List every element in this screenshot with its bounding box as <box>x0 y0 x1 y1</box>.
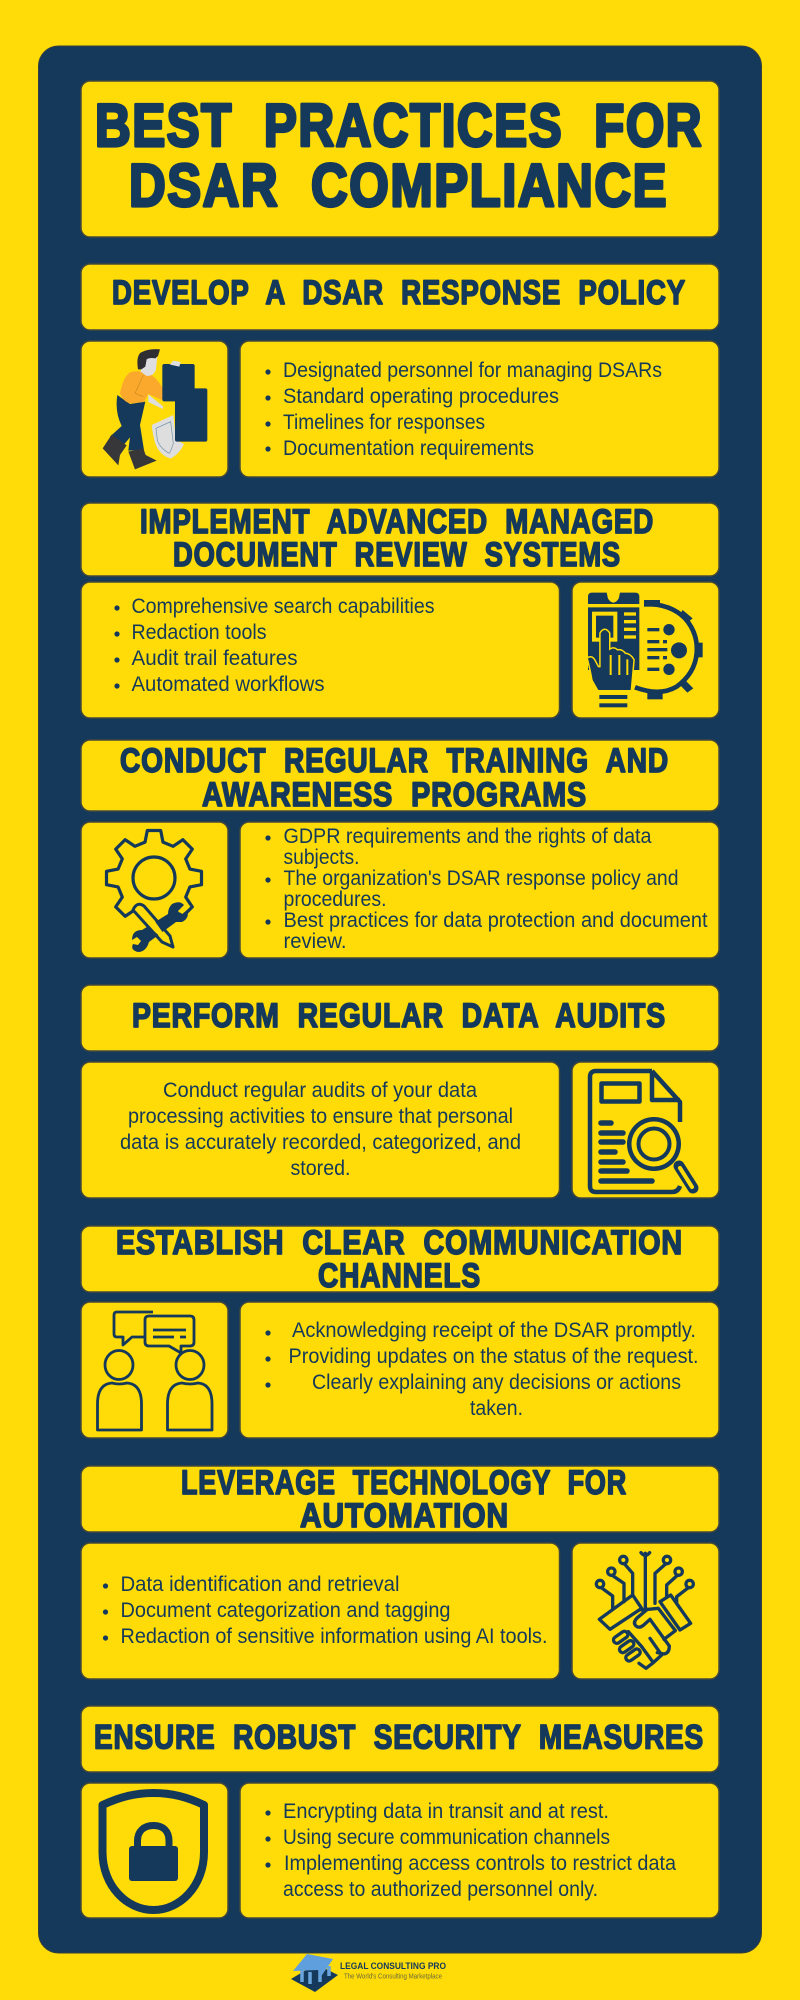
panel: tech handshake icon <box>572 1543 719 1679</box>
panel: automation list: Redaction of sensitive information using AI tools. <box>120 1624 548 1648</box>
panel: communication list: Clearly explaining any decisions or actions <box>312 1370 681 1394</box>
icon: document with magnifier <box>590 1071 693 1192</box>
heading: communication <box>81 1224 719 1295</box>
panel: policy list: Designated personnel for managing DSARs <box>283 358 662 382</box>
panel: gear and tools icon <box>81 822 228 958</box>
heading: data audits: PERFORM REGULAR DATA AUDITS <box>132 997 666 1035</box>
panel: communication list: Acknowledging receipt of the DSAR promptly. <box>292 1318 696 1342</box>
panel: document search icon <box>572 1062 719 1198</box>
panel: training list: subjects. <box>284 845 360 869</box>
logo: Legal Consulting Pro: LEGAL CONSULTING PRO <box>340 1961 446 1972</box>
panel: review list: Audit trail features <box>132 646 298 670</box>
panel: training list: review. <box>284 929 346 953</box>
panel: communication list <box>240 1302 719 1438</box>
panel: policy list: Standard operating procedures <box>283 384 559 408</box>
panel: training list <box>240 822 719 958</box>
panel: communication list: Providing updates on the status of the request. <box>288 1344 698 1368</box>
panel: review list <box>81 582 560 718</box>
icon: building <box>291 1954 338 1992</box>
icon: two people with speech bubbles <box>98 1312 212 1430</box>
panel: security list: Implementing access controls to restrict data <box>284 1851 676 1875</box>
title: DSAR COMPLIANCE <box>129 152 668 219</box>
logo: Legal Consulting Pro <box>291 1954 446 1992</box>
panel: training list: Best practices for data protection and document <box>284 908 708 932</box>
heading: automation <box>81 1464 719 1535</box>
icon: person with documents and shield <box>103 349 207 469</box>
panel: policy list: Documentation requirements <box>283 436 534 460</box>
icon: circuit handshake <box>596 1553 693 1668</box>
panel: policy list: Timelines for responses <box>283 410 485 434</box>
icon: gear with pencil and wrench <box>106 830 202 952</box>
panel: training list: GDPR requirements and the rights of data <box>284 824 652 848</box>
panel: training list: procedures. <box>284 887 386 911</box>
panel: audit text <box>81 1062 560 1198</box>
heading: document review: DOCUMENT REVIEW SYSTEMS <box>173 536 621 574</box>
panel: shield lock icon <box>81 1783 228 1918</box>
heading: communication: ESTABLISH CLEAR COMMUNICATION <box>116 1224 683 1262</box>
panel: touch and gear icon <box>572 582 719 718</box>
heading: automation: LEVERAGE TECHNOLOGY FOR <box>181 1464 627 1502</box>
panel: policy list <box>240 341 719 477</box>
panel: security list: access to authorized personnel only. <box>283 1877 598 1901</box>
panel: automation list <box>81 1543 560 1679</box>
panel: people talking icon <box>81 1302 228 1438</box>
heading: data audits <box>81 985 719 1051</box>
heading: document review: IMPLEMENT ADVANCED MANAGED <box>140 503 654 541</box>
heading: develop policy: DEVELOP A DSAR RESPONSE POLICY <box>112 274 686 312</box>
logo: Legal Consulting Pro: The World's Consulting Marketplace <box>344 1974 442 1980</box>
heading: security <box>81 1706 719 1772</box>
heading: document review <box>81 503 719 576</box>
panel: review list: Comprehensive search capabilities <box>132 594 434 618</box>
panel: training list: The organization's DSAR response policy and <box>284 866 678 890</box>
panel: security list <box>240 1783 719 1918</box>
heading: training <box>81 740 719 814</box>
icon: phone, hand and gear <box>588 593 703 707</box>
panel: audit text: stored. <box>290 1156 350 1180</box>
panel: review list: Automated workflows <box>132 672 324 696</box>
panel: automation list: Document categorization and tagging <box>120 1598 450 1622</box>
title <box>81 81 719 237</box>
panel: audit text: data is accurately recorded, categorized, and <box>120 1130 521 1154</box>
panel: person icon <box>81 341 228 477</box>
heading: automation: AUTOMATION <box>300 1497 509 1535</box>
heading: training: AWARENESS PROGRAMS <box>202 776 587 814</box>
panel: automation list: Data identification and retrieval <box>120 1572 400 1596</box>
panel: audit text: Conduct regular audits of your data <box>163 1078 477 1102</box>
panel: review list: Redaction tools <box>132 620 266 644</box>
panel: security list: Using secure communication channels <box>283 1825 610 1849</box>
panel: communication list: taken. <box>470 1396 523 1420</box>
panel: audit text: processing activities to ensure that personal <box>128 1104 513 1128</box>
heading: communication: CHANNELS <box>318 1257 481 1295</box>
heading: training: CONDUCT REGULAR TRAINING AND <box>120 742 669 780</box>
heading: develop policy <box>81 264 719 330</box>
icon: shield with padlock <box>102 1793 204 1910</box>
panel: security list: Encrypting data in transit and at rest. <box>283 1799 609 1823</box>
